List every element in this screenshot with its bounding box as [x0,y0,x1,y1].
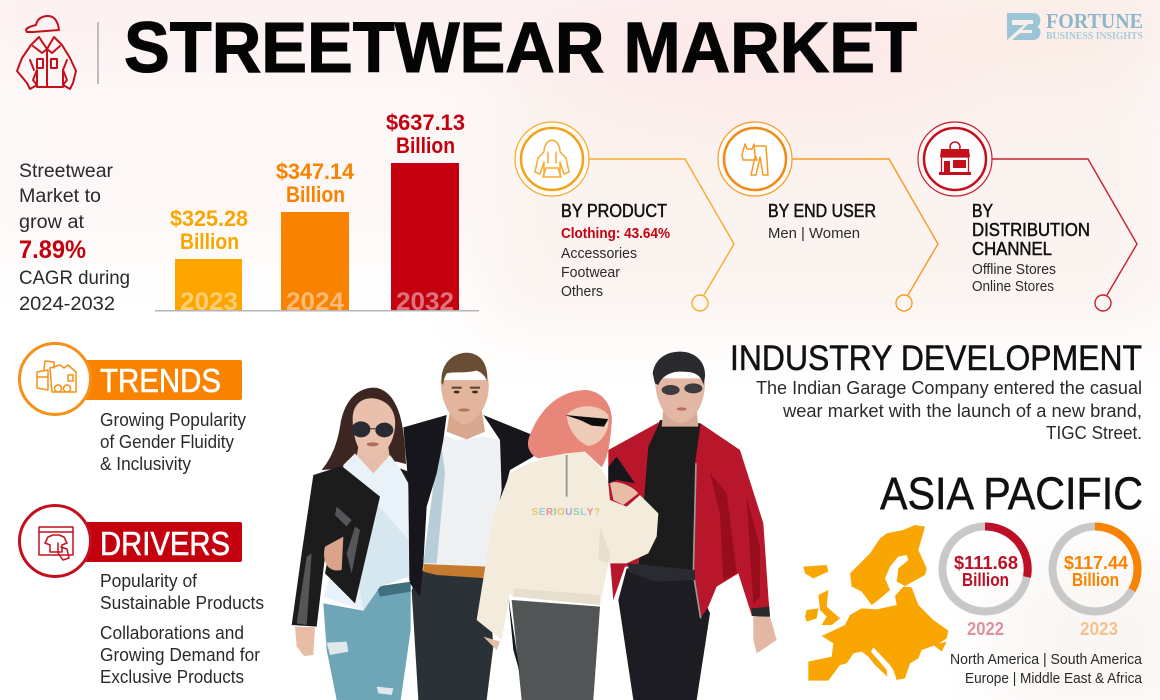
person: man in red jacket and black turtleneck [608,352,777,700]
person: woman with pink hair in cream sweater: SERIOUSLY? [532,507,600,518]
title: STREETWEAR MARKET [124,9,917,88]
segment: by end user: BY END USER [768,201,876,221]
bar chart: market size: Billion [396,133,455,158]
bar chart: market size: 2032 [396,288,454,316]
panel: trends [20,344,246,474]
bar chart: market size [155,110,479,316]
bar chart: market size: 2024 [286,288,344,316]
person: woman with pink hair in cream sweater [477,390,658,700]
donut chart: 2022: Billion [962,570,1009,590]
text: other regions: Europe | Middle East & Africa [965,671,1143,687]
panel: drivers: Growing Demand for [100,645,260,665]
logo: Fortune Business Insights: FORTUNE [1046,9,1143,33]
segment: by distribution channel: Offline Stores [972,261,1056,278]
donut chart: 2022: 2022 [967,619,1004,639]
panel: trends: Growing Popularity [100,410,246,430]
person: woman in leather jacket and jeans [292,388,415,700]
segment: by distribution channel [918,122,1137,311]
segment: by distribution channel: DISTRIBUTION [972,220,1090,240]
CAGR text block: 2024-2032 [19,294,115,315]
CAGR text block: CAGR during [19,268,130,289]
panel: drivers: Exclusive Products [100,667,244,687]
panel: trends: TRENDS [100,362,221,399]
segment: by distribution channel: BY [972,201,993,221]
CAGR text block: Market to [19,186,101,207]
text: other regions [950,652,1143,687]
segment: by product [515,122,734,311]
panel: drivers: Collaborations and [100,623,244,643]
CAGR text block [19,161,130,315]
panel: drivers: Sustainable Products [100,593,264,613]
segment: by product: Accessories [561,245,637,262]
text: industry development body: The Indian Garage Company entered the casual [756,378,1142,398]
bar chart: market size: Billion [180,229,239,254]
segment: by product: Footwear [561,264,620,281]
illustration: group of four people in streetwear [292,352,777,700]
donut chart: 2023: $117.44 [1064,553,1128,573]
text: industry development body [756,378,1142,443]
text: industry development body: TIGC Street. [1046,423,1142,443]
segment: by product: Others [561,283,603,300]
segment: by product: Clothing: 43.64% [561,226,670,242]
donut chart: 2023 [1052,526,1138,639]
logo: Fortune Business Insights: BUSINESS INSIGHTS [1046,31,1143,42]
CAGR text block: grow at [19,212,85,233]
donut chart: 2022: $111.68 [954,553,1018,573]
bar chart: market size: 2023 [180,288,238,316]
icon: jacket and cap [17,16,76,89]
donut chart: 2023: Billion [1072,570,1119,590]
segment: by product: BY PRODUCT [561,201,667,221]
panel: trends: of Gender Fluidity [100,432,234,452]
segment: by distribution channel: Online Stores [972,278,1054,295]
heading: asia pacific: ASIA PACIFIC [880,468,1143,519]
person: man in leather jacket and white t-shirt [324,353,537,700]
panel: drivers: Popularity of [100,571,198,591]
logo: Fortune Business Insights [1007,9,1143,42]
map: Europe [803,525,948,681]
donut chart: 2023: 2023 [1080,619,1118,639]
segment: by distribution channel: CHANNEL [972,239,1052,259]
title divider [97,22,99,84]
bar chart: market size: Billion [286,182,345,207]
panel: trends: & Inclusivity [100,454,191,474]
segment: by end user: Men | Women [768,225,860,242]
bar chart: market size: $637.13 [386,110,465,135]
text: industry development body: wear market with the launch of a new brand, [782,401,1142,421]
panel: drivers: DRIVERS [100,525,230,562]
segment: by end user [718,122,938,311]
panel: drivers [20,506,264,687]
bar chart: market size: $347.14 [276,159,355,184]
CAGR text block: Streetwear [19,161,114,182]
text: other regions: North America | South America [950,652,1143,668]
bar chart: market size: $325.28 [170,206,248,231]
donut chart: 2022 [942,526,1028,639]
CAGR text block: 7.89% [19,236,86,264]
